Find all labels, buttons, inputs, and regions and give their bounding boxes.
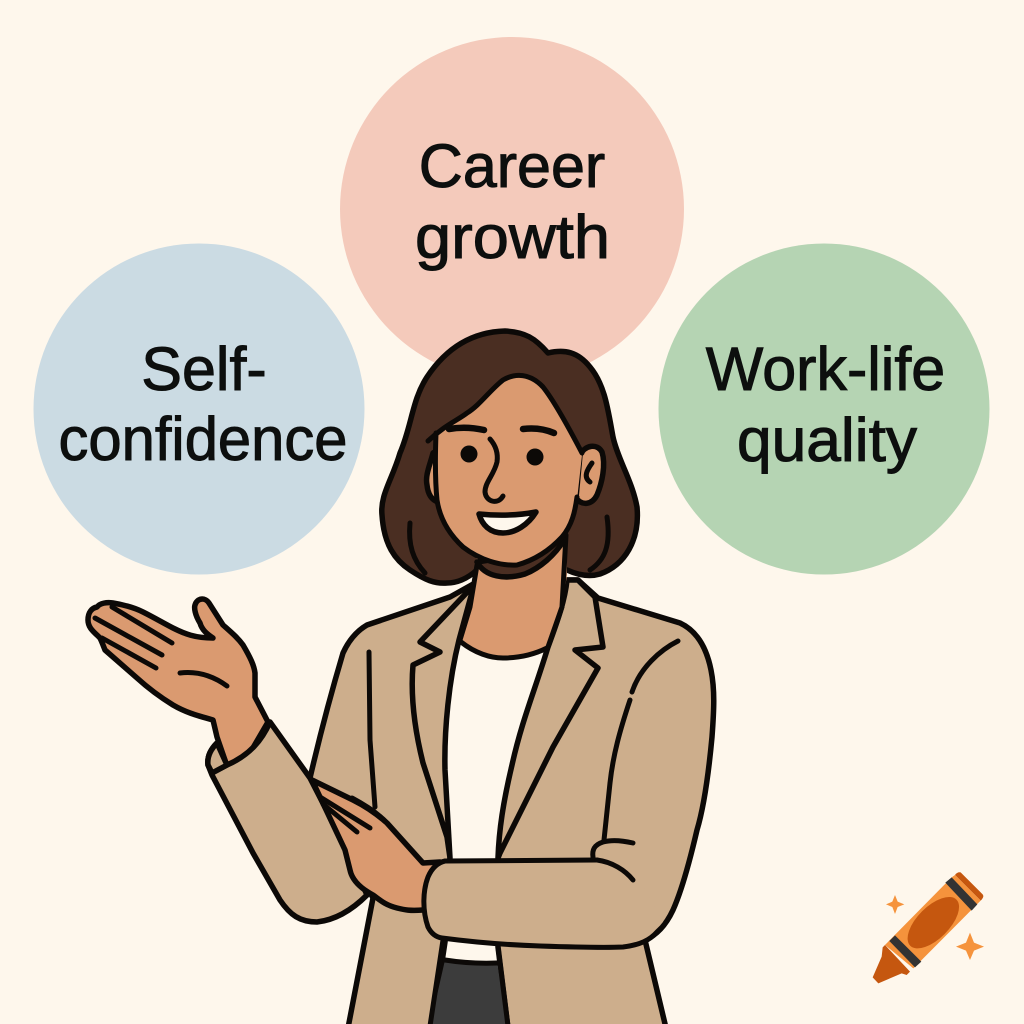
circle: self-confidence xyxy=(34,244,364,574)
lapels xyxy=(412,580,603,858)
hair xyxy=(382,331,637,583)
eyebrows xyxy=(449,428,554,433)
circle: self-confidence: confidence xyxy=(58,405,348,473)
circle: self-confidence: Self- xyxy=(141,335,267,403)
trousers xyxy=(430,940,508,1024)
jacket forearm xyxy=(424,641,678,947)
circle: work-life quality: quality xyxy=(737,406,918,474)
illustration: presenting woman xyxy=(88,331,714,1024)
nose xyxy=(485,439,503,501)
circle: career growth: Career xyxy=(419,132,605,200)
raised hand xyxy=(88,599,268,766)
face outline xyxy=(428,375,582,565)
white shirt xyxy=(445,640,548,860)
eyes xyxy=(460,446,544,466)
left ear xyxy=(427,450,438,502)
circle: work-life quality: Work-life xyxy=(706,335,945,403)
smile xyxy=(479,512,536,533)
neck xyxy=(458,535,567,658)
jacket body xyxy=(310,580,714,1024)
right ear xyxy=(576,446,604,503)
circle: work-life quality xyxy=(658,244,990,574)
lower hand xyxy=(312,780,440,910)
circle: career growth: growth xyxy=(415,203,610,271)
icon: crayon with sparkles xyxy=(873,872,984,983)
jacket sleeve and cuff xyxy=(208,722,367,922)
face xyxy=(435,375,582,565)
hair strands xyxy=(410,517,608,573)
circle: career growth xyxy=(340,37,684,381)
